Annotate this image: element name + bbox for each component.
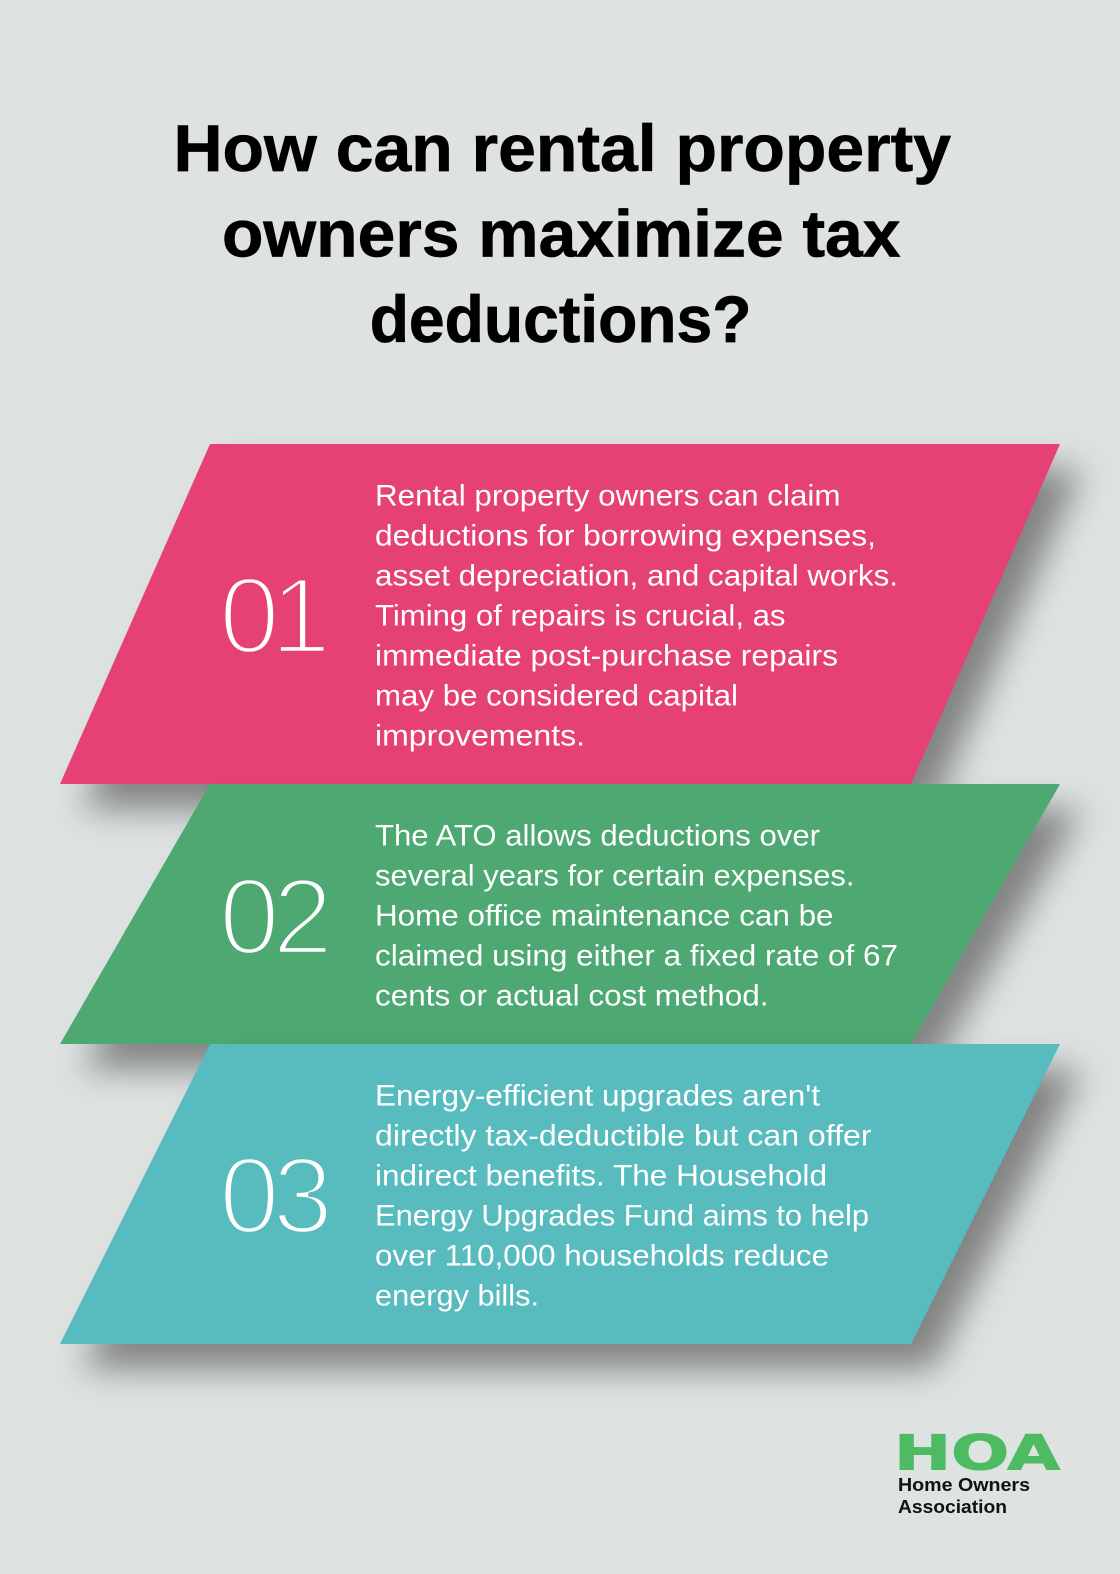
text block: step 03: Energy-efficient upgrades aren't: [375, 1080, 821, 1112]
text block: step 03: directly tax-deductible but can offer: [375, 1120, 872, 1152]
text block: step 01: [375, 480, 898, 752]
text block: step 03: energy bills.: [375, 1280, 539, 1312]
number 01: 01: [219, 555, 331, 677]
text block: step 01: Timing of repairs is crucial, as: [375, 600, 786, 632]
text block: step 03: Energy Upgrades Fund aims to help: [375, 1200, 869, 1232]
band: teal parallelogram: [60, 1044, 1060, 1344]
text block: step 02: several years for certain expenses.: [375, 860, 854, 892]
logo: HOA Home Owners Association: Association: [898, 1497, 1007, 1517]
panel: step 01: [60, 444, 1082, 809]
text block: step 01: asset depreciation, and capital works.: [375, 560, 898, 592]
text block: step 02: claimed using either a fixed rate of 67: [375, 940, 898, 972]
text block: step 01: may be considered capital: [375, 680, 738, 712]
panel: step 02: [60, 784, 1082, 1069]
text block: step 02: [375, 820, 898, 1012]
title: [174, 111, 951, 356]
number 02: 02: [219, 856, 333, 978]
number 03: 03: [219, 1135, 333, 1257]
text block: step 02: The ATO allows deductions over: [375, 820, 820, 852]
text block: step 01: deductions for borrowing expenses,: [375, 520, 876, 552]
panel: step 03: [60, 1044, 1082, 1369]
band: pink parallelogram: [60, 444, 1060, 784]
title: deductions?: [370, 282, 752, 356]
text block: step 02: cents or actual cost method.: [375, 980, 768, 1012]
logo: HOA Home Owners Association: HOA: [894, 1426, 1060, 1482]
text block: step 01: improvements.: [375, 720, 585, 752]
text block: step 03: indirect benefits. The Household: [375, 1160, 827, 1192]
title: How can rental property: [174, 111, 951, 185]
text block: step 01: Rental property owners can claim: [375, 480, 840, 512]
text block: step 03: [375, 1080, 872, 1312]
logo: HOA Home Owners Association: [894, 1426, 1060, 1517]
logo: HOA Home Owners Association: Home Owners: [898, 1475, 1030, 1495]
title: owners maximize tax: [222, 196, 901, 270]
text block: step 01: immediate post-purchase repairs: [375, 640, 838, 672]
text block: step 02: Home office maintenance can be: [375, 900, 834, 932]
band: green parallelogram: [60, 784, 1060, 1044]
text block: step 03: over 110,000 households reduce: [375, 1240, 829, 1272]
